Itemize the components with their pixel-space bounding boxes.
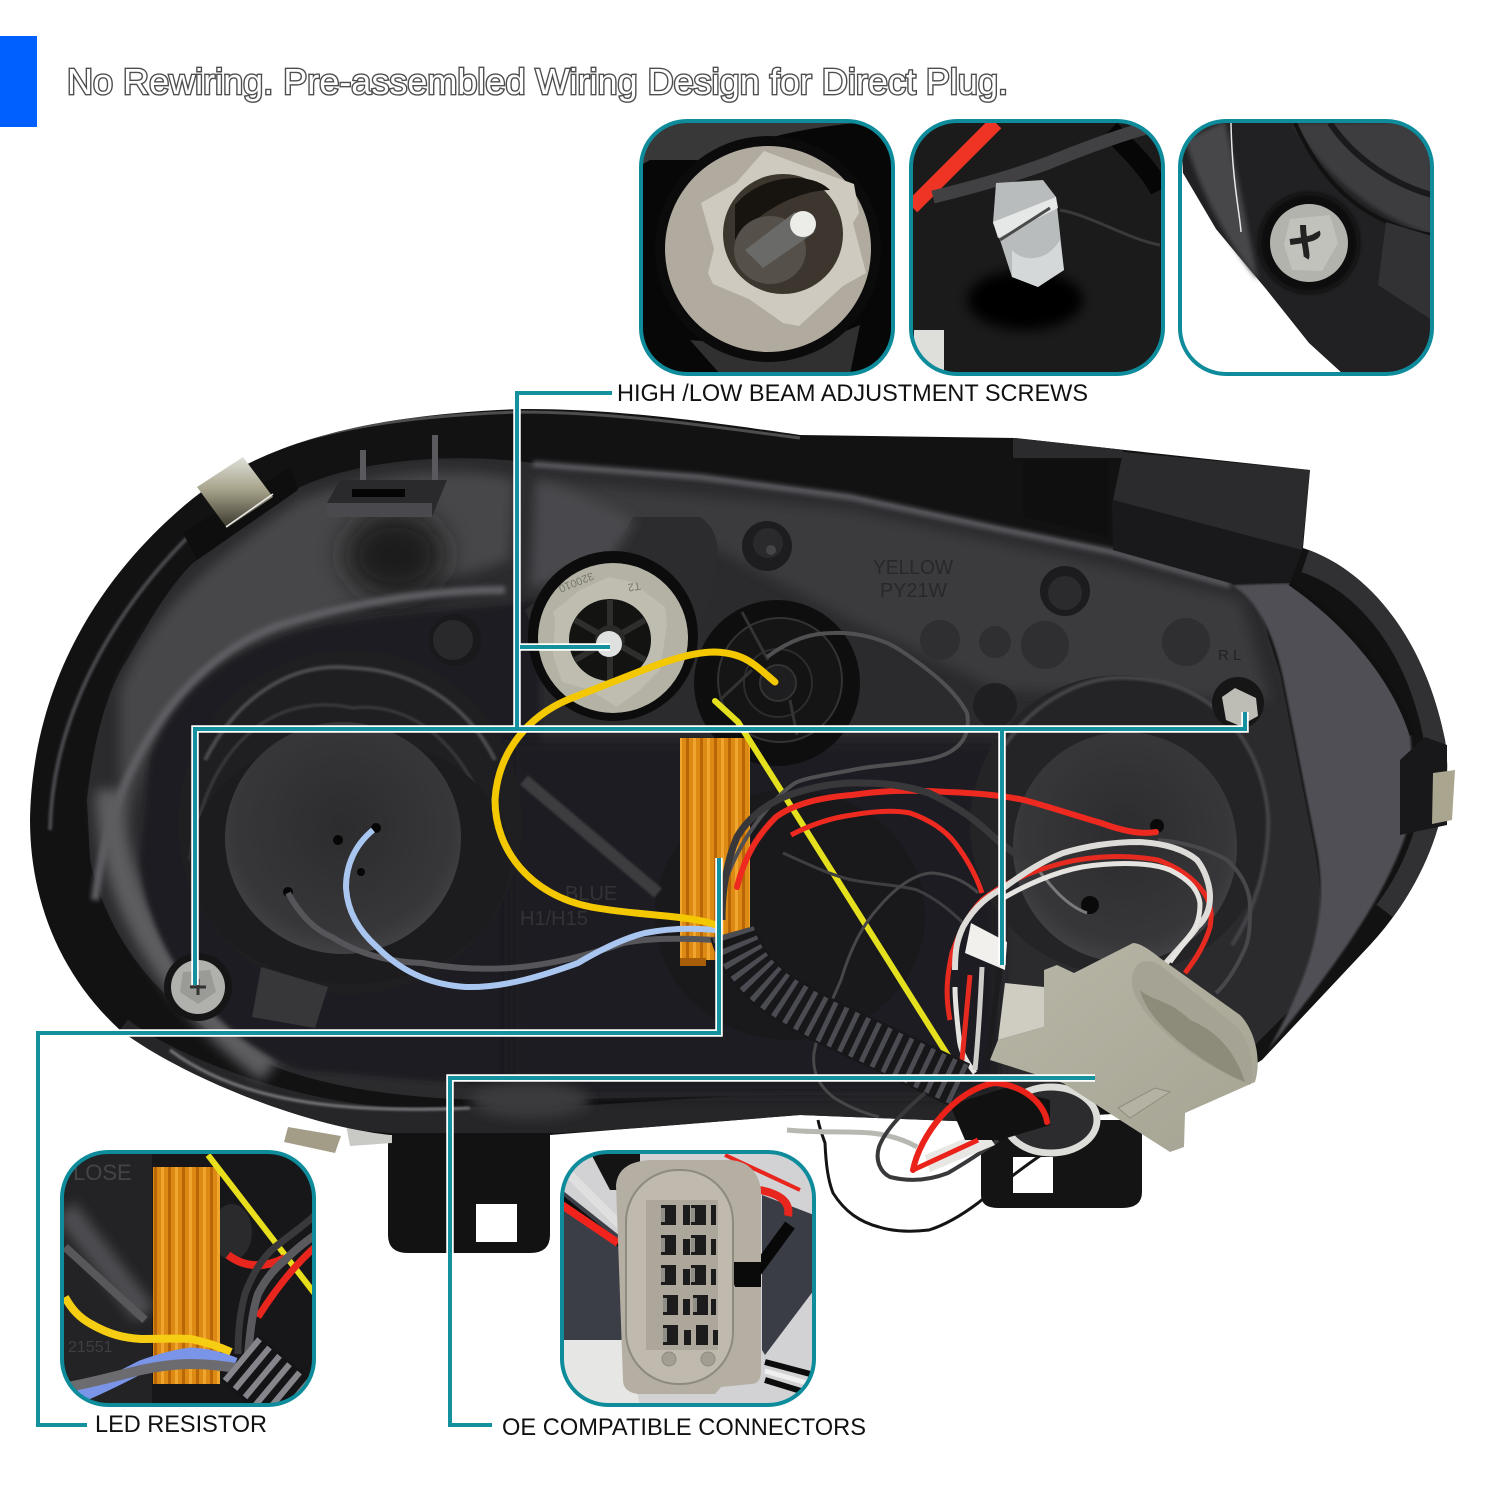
grey wire to dome (288, 893, 716, 969)
second hole right dome (1081, 896, 1099, 914)
top clip bracket (327, 435, 447, 517)
plug latch (1118, 1088, 1170, 1118)
bump lower right (973, 683, 1017, 727)
centre plate light (540, 480, 1270, 700)
lower connector cluster (913, 1083, 1097, 1172)
top edge highlight (282, 410, 800, 449)
plate top ridge (533, 464, 1230, 585)
red wire long (737, 791, 1156, 887)
right dome cap (1013, 732, 1237, 962)
accent block (0, 36, 37, 127)
interior dark zone left (140, 600, 540, 1090)
moulded text yellow: YELLOW (873, 557, 953, 579)
bulb socket bulge (525, 517, 718, 690)
bump upper right (1040, 566, 1090, 616)
red wire second (791, 811, 982, 893)
lower left clip (284, 1125, 392, 1153)
mounting tab: lower right (981, 1120, 1142, 1208)
bump left (429, 614, 481, 666)
moulded text PY21W: PY21W (880, 580, 947, 602)
label: LED resistor: LED RESISTOR (95, 1411, 267, 1438)
thin dark wire centre one (783, 853, 963, 923)
bundle to connector (962, 960, 1001, 1070)
blue wire (346, 830, 716, 987)
right lobe (1232, 583, 1415, 1050)
interior dark zone centre (510, 740, 1000, 1095)
outer shell (30, 409, 1448, 1135)
moulded text blue: BLUE (565, 883, 617, 905)
upper left plate light (120, 472, 515, 840)
top wall (1113, 452, 1310, 550)
red sleeve loop (947, 857, 1211, 1020)
title: No Rewiring. Pre-assembled Wiring Design for Direct Plug. (67, 61, 1008, 102)
panel: LED resistor close-up (62, 1152, 315, 1408)
white inline plug (965, 923, 1007, 970)
corrugated loom (733, 932, 960, 1085)
white wire loop inner (955, 864, 1200, 1073)
headlamp rear photo (0, 380, 1500, 1253)
left lower bracket (252, 967, 328, 1028)
right dome highlight (1005, 678, 1268, 945)
left rim groove (50, 535, 190, 830)
right dome outer ring (970, 675, 1270, 975)
label: OE connectors: OE COMPATIBLE CONNECTORS (502, 1414, 866, 1441)
bottom rim (120, 1030, 1000, 1120)
main plug body (990, 943, 1258, 1152)
black bulb cap (694, 600, 860, 766)
grey wire to right dome (1036, 867, 1087, 913)
lower left band edge (170, 1050, 470, 1109)
dark wire right loop (1158, 840, 1250, 993)
right dome hole (1150, 819, 1164, 833)
lower left band light (110, 790, 270, 1070)
bump top centre (742, 521, 792, 571)
light block behind plug (998, 983, 1044, 1040)
thin dark wire from cap (726, 633, 968, 880)
panel: slotted screw close-up (911, 121, 1163, 374)
moulded diagonal strip (524, 780, 658, 893)
yellow thin wire (715, 701, 952, 1062)
bottom light lower centre (470, 1082, 590, 1118)
socket light (530, 480, 635, 590)
panel: hex screw close-up (1180, 121, 1432, 374)
top bracket cap (1013, 437, 1123, 458)
callout line: OE connectors (450, 1078, 1095, 1425)
panel: OE connector close-up (562, 1152, 814, 1405)
wall lower band (1113, 547, 1290, 583)
adjuster screw left (164, 953, 232, 1021)
thin dark wire loop (814, 873, 978, 1117)
panel: LED resistor close-up: 21551 (68, 1339, 113, 1356)
callout line: LED resistor (38, 858, 719, 1425)
left dome outer ring (178, 650, 522, 994)
beige adjuster disc: T2 (627, 579, 642, 593)
right rim band (1307, 556, 1443, 915)
white wire loop outer (955, 842, 1210, 970)
left dome cap (225, 722, 461, 954)
callout lines: adjustment screws (195, 393, 1245, 985)
right lobe groove (1290, 583, 1412, 735)
moulded text bulb: H1/H15 (520, 908, 588, 930)
centre recess (655, 790, 925, 1040)
shadow under top clip (345, 513, 445, 597)
beige adjuster disc: 320010 (557, 569, 595, 594)
panel: LED resistor close-up: LOSE (73, 1160, 132, 1185)
moulded logos (920, 618, 1210, 669)
panel: beam adjuster close-up (641, 121, 893, 374)
loose lower wires (787, 1093, 1044, 1231)
label: adjustment screws: HIGH /LOW BEAM ADJUSTMENT SCREWS (617, 380, 1088, 407)
left retaining clip (183, 457, 298, 560)
top bracket body (1023, 460, 1108, 537)
left dome ridges (190, 667, 495, 860)
dark wire long (722, 783, 1036, 920)
adjuster screw right (1212, 677, 1264, 729)
left dome holes (283, 823, 381, 897)
plug opening (1132, 961, 1252, 1085)
left dome ring lower (190, 736, 510, 984)
housing shell and plate (30, 409, 1448, 1135)
back plate (87, 458, 1320, 1100)
mounting tab: lower left (388, 1120, 550, 1253)
plug opening shadow (1140, 990, 1245, 1082)
right retaining clip (1400, 737, 1455, 835)
beige adjuster disc (528, 551, 698, 721)
ridge arc left (95, 590, 505, 900)
resistor (680, 738, 750, 966)
moulded text R L: R L (1218, 647, 1241, 664)
yellow thick wire (495, 652, 775, 925)
